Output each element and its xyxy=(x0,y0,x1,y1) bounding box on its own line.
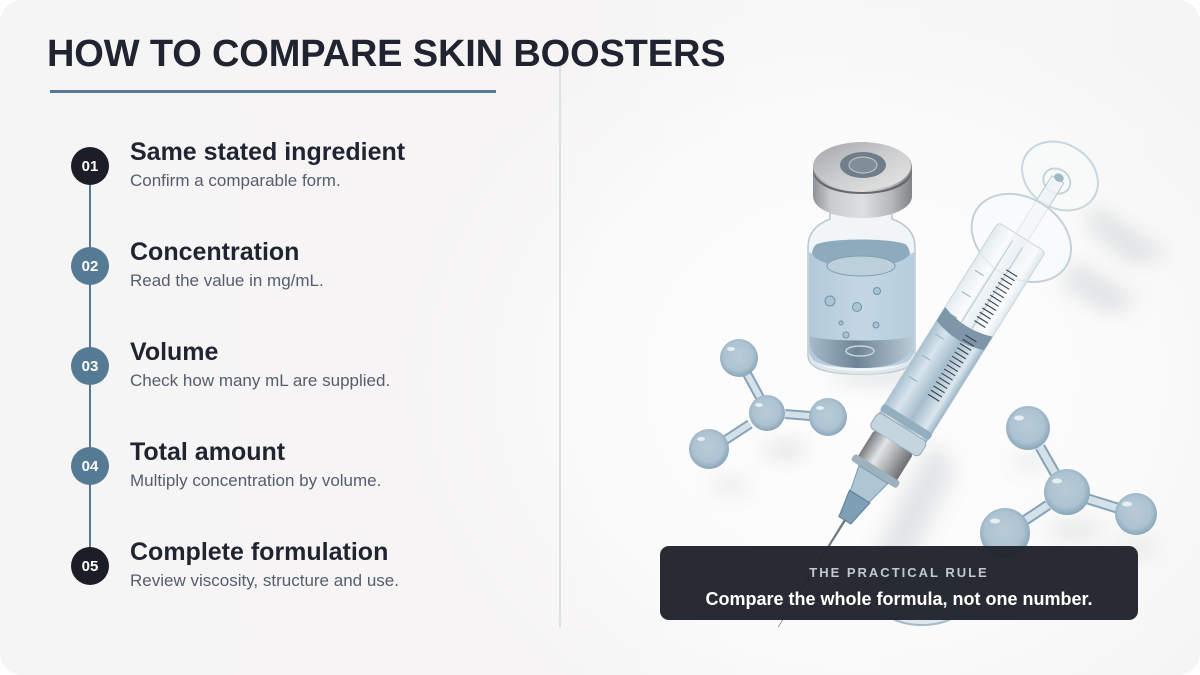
step 4 number xyxy=(71,447,109,485)
vial glass body xyxy=(808,213,915,374)
plunger flange xyxy=(1009,128,1111,224)
step 5 number: 05 xyxy=(82,558,98,575)
timeline connector xyxy=(89,166,91,566)
step 4 number: 04 xyxy=(82,458,98,475)
step 5 heading: Complete formulation xyxy=(130,538,388,566)
callout: the practical rule xyxy=(660,546,1138,620)
title: HOW TO COMPARE SKIN BOOSTERS xyxy=(47,33,725,75)
plunger rod xyxy=(957,176,1064,336)
rubber stopper xyxy=(934,307,993,355)
step 3 number: 03 xyxy=(82,358,98,375)
spheres xyxy=(1006,406,1050,450)
step 3 number xyxy=(71,347,109,385)
column divider xyxy=(559,65,561,627)
step 4 xyxy=(71,438,381,490)
bonds xyxy=(724,370,810,441)
step 5 description: Review viscosity, structure and use. xyxy=(130,571,399,590)
icon: syringe xyxy=(733,121,1122,655)
dish under callout xyxy=(876,571,968,625)
title underline xyxy=(50,90,496,93)
step 2 xyxy=(71,238,324,290)
icon: left molecule xyxy=(689,339,847,469)
highlights xyxy=(990,416,1132,524)
aluminium cap xyxy=(813,143,912,218)
faint scale ticks xyxy=(909,270,984,382)
step 2 heading: Concentration xyxy=(130,238,299,266)
step 4 description: Multiply concentration by volume. xyxy=(130,471,381,490)
step 2 number xyxy=(71,247,109,285)
icon: vial xyxy=(808,142,915,374)
step 1 description: Confirm a comparable form. xyxy=(130,171,341,190)
vial liquid xyxy=(809,252,914,368)
graduation marks xyxy=(928,270,1017,401)
highlights xyxy=(697,347,824,441)
step 3 heading: Volume xyxy=(130,338,218,366)
metal collar xyxy=(857,430,913,482)
bonds xyxy=(1024,447,1117,521)
vial base xyxy=(810,336,913,368)
step 3 description: Check how many mL are supplied. xyxy=(130,371,390,390)
step 5 number xyxy=(71,547,109,585)
finger flange xyxy=(955,176,1087,300)
step 2 number: 02 xyxy=(82,258,98,275)
bubbles xyxy=(825,288,880,338)
liquid surface xyxy=(812,240,910,268)
callout message: Compare the whole formula, not one number. xyxy=(705,589,1093,609)
step 1 xyxy=(71,138,405,190)
step 1 number xyxy=(71,147,109,185)
step 1 number: 01 xyxy=(82,158,98,175)
cap seal xyxy=(840,152,886,178)
soft shadows xyxy=(710,205,1170,610)
step 2 description: Read the value in mg/mL. xyxy=(130,271,324,290)
plunger core line xyxy=(962,241,1023,328)
spheres xyxy=(720,339,758,377)
step 4 heading: Total amount xyxy=(130,438,285,466)
step 5 xyxy=(71,538,399,590)
callout label: THE PRACTICAL RULE xyxy=(809,565,989,580)
icon: right molecule xyxy=(980,406,1157,558)
barrel liquid xyxy=(878,312,989,444)
barrel xyxy=(878,222,1046,444)
needle xyxy=(777,520,846,628)
step 3 xyxy=(71,338,390,390)
step 1 heading: Same stated ingredient xyxy=(130,138,405,166)
barrel shoulder xyxy=(880,403,933,441)
needle hub xyxy=(845,466,888,506)
